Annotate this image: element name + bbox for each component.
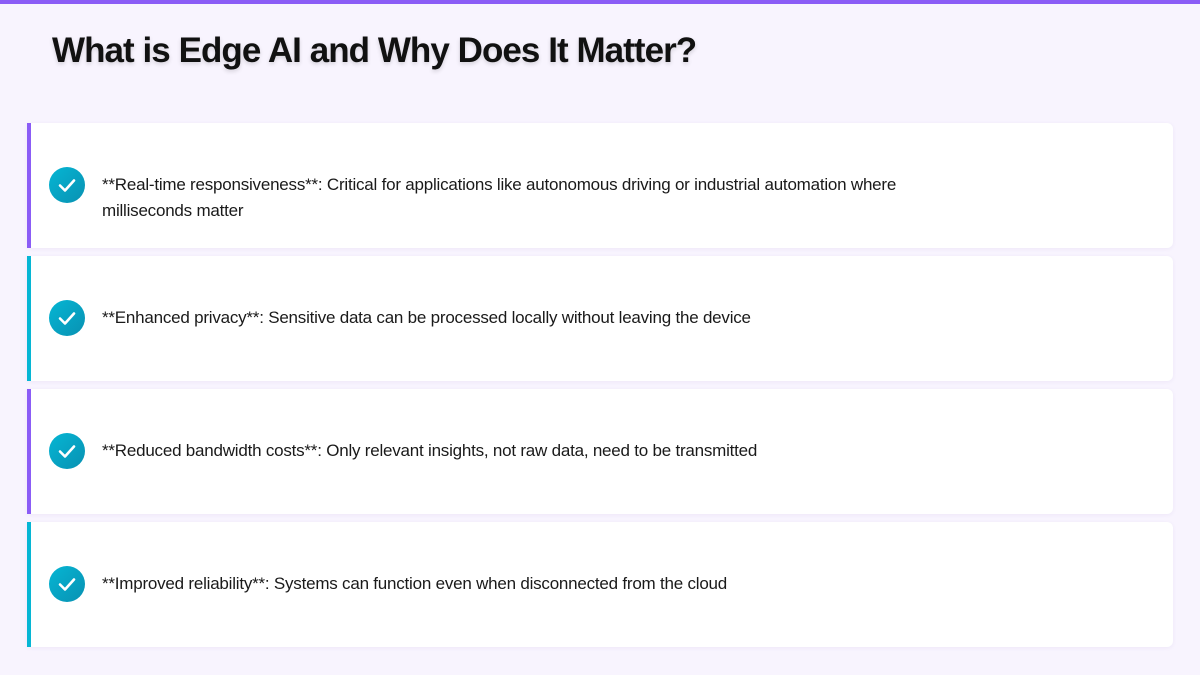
card: real-time responsiveness bbox=[27, 123, 1173, 248]
icon: check bbox=[49, 167, 85, 203]
icon: check bbox=[49, 300, 85, 336]
text: **Improved reliability**: Systems can function even when disconnected from the cloud bbox=[102, 574, 727, 593]
icon: check bbox=[49, 566, 85, 602]
icon: check bbox=[49, 433, 85, 469]
card: reduced bandwidth bbox=[27, 389, 1173, 514]
card: enhanced privacy bbox=[27, 256, 1173, 381]
text: **Enhanced privacy**: Sensitive data can be processed locally without leaving the device bbox=[102, 308, 751, 327]
card: improved reliability bbox=[27, 522, 1173, 647]
title: What is Edge AI and Why Does It Matter? bbox=[52, 31, 696, 70]
text: **Reduced bandwidth costs**: Only relevant insights, not raw data, need to be transmitted bbox=[102, 441, 757, 460]
text: **Real-time responsiveness**: Critical for applications like autonomous driving or industrial automation where milliseconds matter bbox=[102, 175, 896, 220]
